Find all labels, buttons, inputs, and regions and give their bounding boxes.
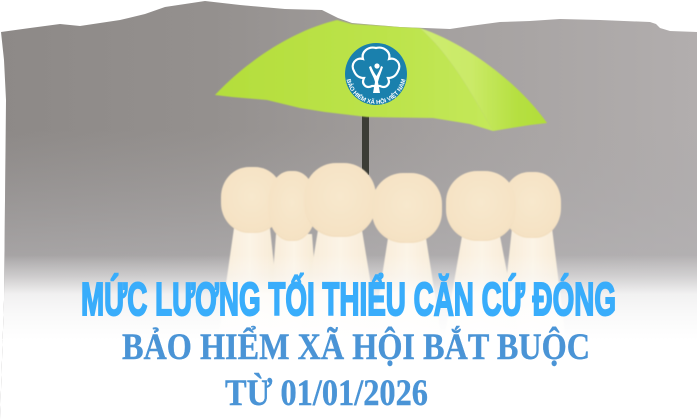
- logo ring text: BẢO HIỂM XÃ HỘI VIỆT NAM: [346, 78, 406, 104]
- figure 4: [372, 172, 442, 307]
- figure 1: [220, 166, 277, 308]
- icon: green umbrella: [215, 20, 547, 131]
- figure 2: [272, 170, 314, 308]
- logo flower: [353, 48, 399, 87]
- title line 3: TỪ 01/01/2026: [225, 372, 428, 414]
- icon: umbrella pole: [362, 115, 369, 175]
- white floor fade: [0, 255, 700, 340]
- figure group: wooden pegs: [220, 162, 562, 308]
- figure 5: [446, 170, 510, 307]
- umbrella right panel: [420, 28, 547, 131]
- logo head dot: [374, 63, 380, 69]
- logo person tree: [369, 66, 383, 93]
- title line 2: BẢO HIỂM XÃ HỘI BẮT BUỘC: [122, 325, 590, 368]
- icon: social insurance logo: [345, 43, 407, 105]
- figure 3: [308, 162, 376, 307]
- figure 6: [506, 172, 562, 307]
